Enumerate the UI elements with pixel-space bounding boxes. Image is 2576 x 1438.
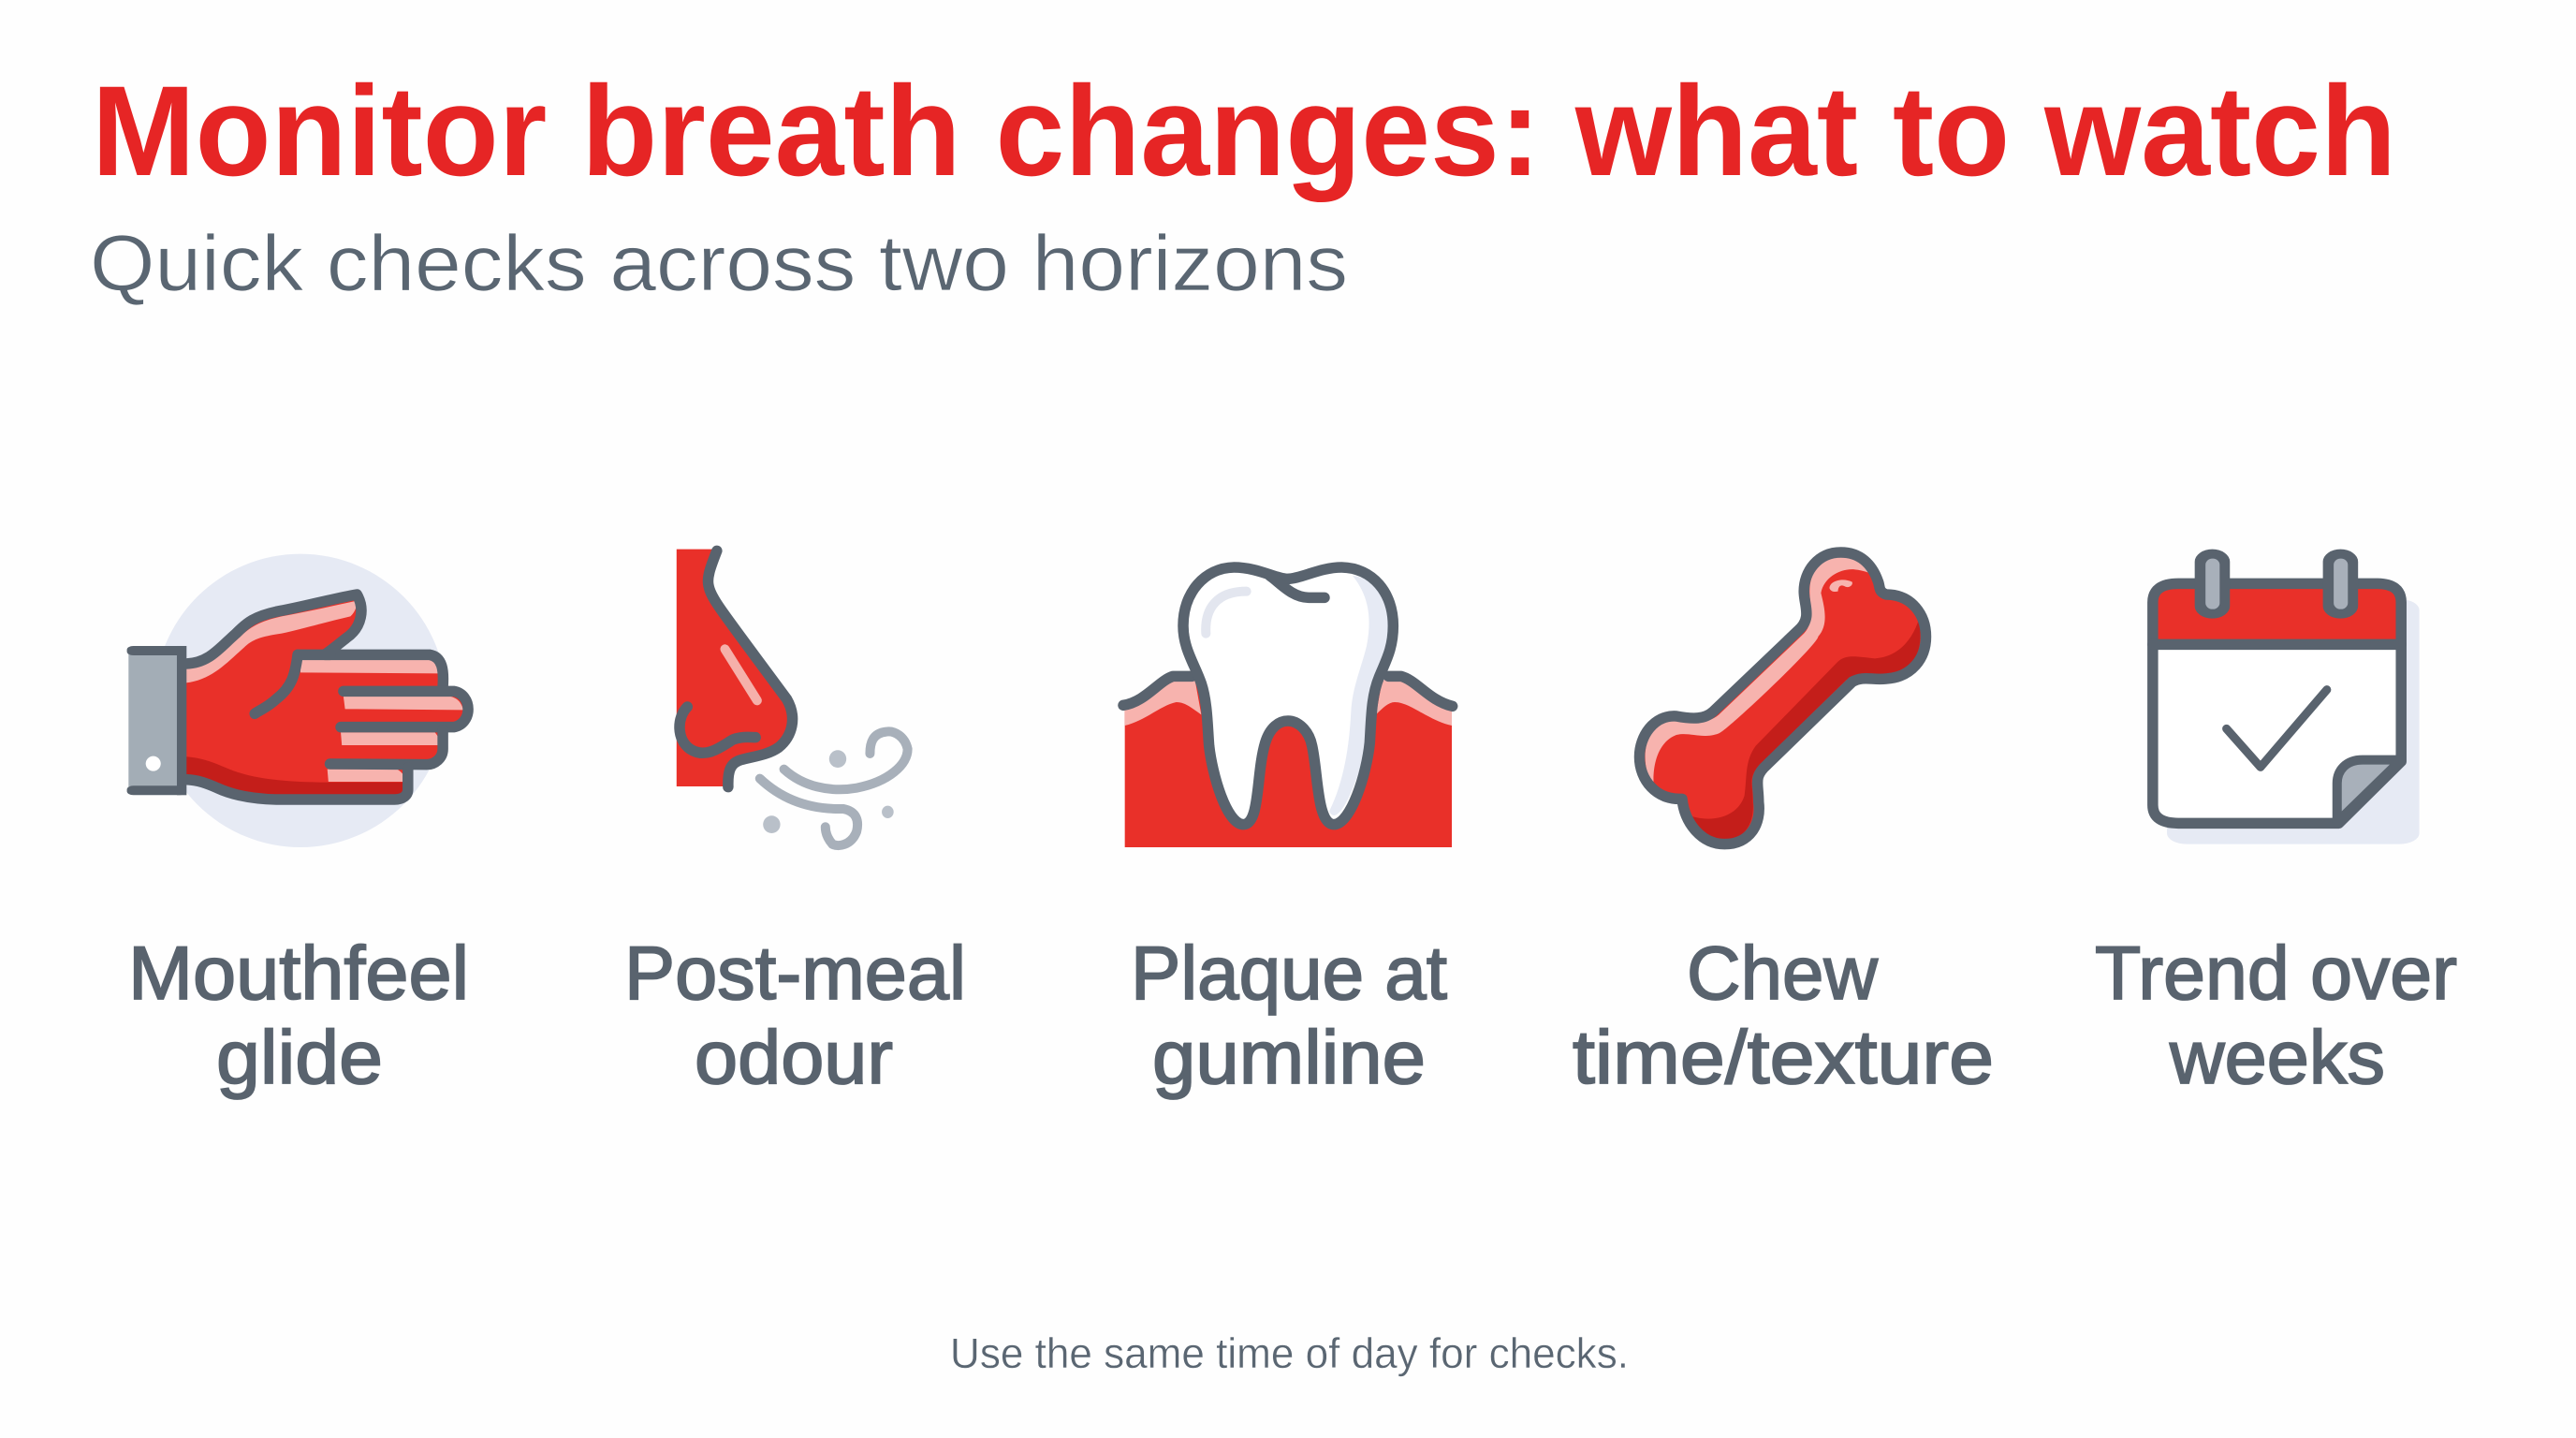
subtitle: Quick checks across two horizons [90, 219, 1348, 307]
hand highlights [186, 601, 463, 782]
label: mouthfeel glide: glide [216, 1016, 383, 1100]
label: plaque at gumline: Plaque at [1131, 932, 1447, 1016]
nose fill [677, 550, 793, 786]
hand shadow [186, 756, 406, 795]
hand outline and finger lines [186, 594, 468, 800]
odour wisps [760, 731, 908, 845]
bone highlight [1646, 555, 1872, 785]
bone outline [1640, 552, 1925, 844]
label: plaque at gumline [1131, 932, 1447, 1100]
label: trend over weeks: weeks [2169, 1016, 2385, 1100]
label: post-meal odour [624, 932, 966, 1100]
label: mouthfeel glide [128, 932, 469, 1100]
footer note: Use the same time of day for checks. [950, 1329, 1629, 1377]
title: Monitor breath changes: what to watch [92, 60, 2396, 203]
odour dots [763, 750, 894, 833]
label: mouthfeel glide: Mouthfeel [128, 932, 469, 1016]
gum [1125, 681, 1452, 847]
label: chew time/texture: Chew [1687, 932, 1878, 1016]
gum outline [1123, 676, 1453, 706]
nose highlight [724, 649, 757, 700]
calendar outline [2153, 583, 2401, 823]
label: plaque at gumline: gumline [1152, 1016, 1426, 1100]
icon: calendar with check [2153, 550, 2420, 844]
icon: nose with odour wisps [677, 550, 908, 845]
gum highlight [1125, 681, 1452, 726]
label: trend over weeks: Trend over [2095, 932, 2457, 1016]
calendar page [2153, 583, 2401, 823]
nose outline [680, 550, 793, 787]
tooth outline [1183, 567, 1393, 825]
tooth shading [1329, 576, 1389, 815]
label: chew time/texture: time/texture [1573, 1016, 1994, 1100]
cuff [127, 646, 186, 795]
tooth highlight [1206, 592, 1247, 634]
icon: bone [1640, 552, 1925, 844]
calendar shadow [2167, 599, 2420, 844]
label: post-meal odour: odour [695, 1016, 893, 1100]
label: trend over weeks [2095, 932, 2457, 1100]
hand silhouette [186, 594, 468, 800]
icon: hand on light circle [127, 554, 468, 847]
icon: tooth in gum [1123, 567, 1453, 847]
label: chew time/texture [1573, 932, 1994, 1100]
bone fill [1640, 552, 1925, 844]
tooth body [1183, 567, 1393, 825]
hand backdrop circle [154, 554, 446, 847]
bone glint [1829, 580, 1852, 592]
calendar header [2153, 583, 2401, 644]
bone shadow [1690, 615, 1920, 840]
page fold [2337, 760, 2401, 822]
label: post-meal odour: Post-meal [624, 932, 966, 1016]
binder ring right [2323, 550, 2358, 619]
check mark [2227, 690, 2327, 767]
binder ring left [2195, 550, 2230, 619]
